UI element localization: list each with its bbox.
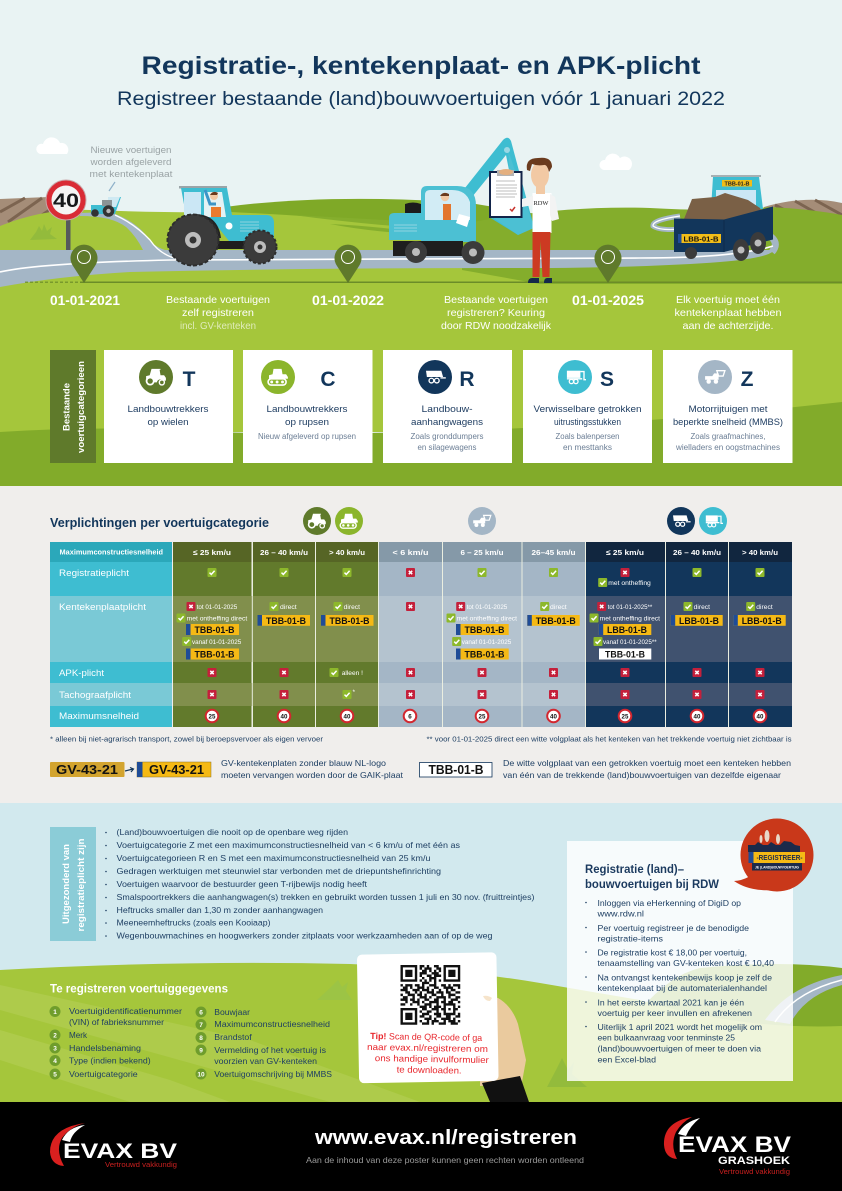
footnotes [50, 734, 792, 744]
icon: speed sign 40 [46, 180, 86, 250]
lower landscape background [0, 803, 842, 1102]
cloud [599, 154, 632, 170]
icon: QR code [400, 966, 460, 1024]
table: licence plate row, trailers: met ontheffing direct [600, 616, 660, 622]
note: new vehicles [89, 145, 173, 191]
list: exempted vehicles: (Land)bouwvoertuigen die nooit op de openbare weg rijden [116, 827, 348, 837]
icon: trailer with soil: TBB-01-B [724, 182, 750, 188]
table: licence plate row, tractors: TBB-01-B [194, 650, 235, 660]
table: header speeds: 26–45 km/u [532, 548, 576, 557]
panel: exempted label: Uitgezonderd van [61, 844, 72, 924]
footnotes: * alleen bij niet-agrarisch transport, zowel bij beroepsvervoer als eigen vervoer [50, 734, 324, 744]
list: vehicle data: Voertuigomschrijving bij MMBS [214, 1069, 332, 1079]
table: maximum speed signs: 25 [479, 713, 486, 720]
list: vehicle data: Bouwjaar [214, 1007, 250, 1017]
panel: RDW registration: www.rdw.nl [596, 908, 644, 918]
list: vehicle data: Merk [69, 1030, 88, 1040]
panel: RDW registration: Inloggen via eHerkenning of DigiD op [598, 898, 741, 908]
table: licence plate row, motor vehicles: met ontheffing direct [457, 616, 517, 622]
panel: RDW registration: tenaamstelling van GV-kenteken kost € 10,40 [598, 958, 774, 968]
table: registration row [208, 568, 764, 587]
table: licence plate row, tractors: direct [280, 604, 297, 611]
panel: category C: Nieuw afgeleverd op rupsen [258, 432, 356, 441]
table: licence plate row, tractors [176, 602, 374, 660]
list: vehicle data: 5 [53, 1072, 57, 1078]
panel: RDW registration: Per voertuig registreer je de benodigde [598, 923, 749, 933]
logo: EVAX BV Grashoek right: GRASHOEK [718, 1155, 790, 1167]
table: licence plate row, motor vehicles: tot 01-01-2025 [467, 604, 508, 611]
icon: RDW man: RDW [534, 201, 549, 207]
table: licence plate row, trailers: LBB-01-B [742, 616, 782, 627]
panel: RDW registration: een Excel-blad [598, 1054, 656, 1064]
panel: category R: Landbouw- [422, 403, 472, 414]
list: vehicle data: 2 [53, 1032, 57, 1040]
footer [0, 1102, 842, 1191]
note: new vehicles: worden afgeleverd [89, 157, 172, 167]
panel: obligations background [0, 486, 842, 803]
white follow plate note: van één van de trekkende (land)bouwvoertuigen van dezelfde eigenaar [503, 770, 781, 780]
panel: existing vehicle categories label: Bestaande [62, 383, 72, 431]
table: maximum speed signs: 40 [694, 713, 701, 720]
panel: category C: C [320, 368, 336, 391]
tip text: te downloaden. [397, 1064, 462, 1076]
table: licence plate row, trailers: vanaf 01-01-2025** [603, 639, 657, 646]
list: vehicle data: 1 [53, 1009, 57, 1016]
footnotes: ** voor 01-01-2025 direct een witte volgplaat als het kenteken van het trekkende voertuig niet zichtbaar is [426, 734, 792, 744]
timeline labels: Elk voertuig moet één [676, 295, 780, 306]
table: licence plate row, motor vehicles: TBB-01-B [536, 616, 576, 627]
icon: big tractor [168, 186, 276, 266]
white follow plate note: De witte volgplaat van een getrokken voertuig moet een kenteken hebben [503, 758, 791, 768]
table: licence plate row, tractors: TBB-01-B [330, 616, 370, 627]
panel: category S: en mesttanks [563, 443, 612, 452]
panel: category Z: Zoals graafmachines, [690, 432, 766, 441]
panel: RDW registration: Uiterlijk 1 april 2021 wordt het mogelijk om [598, 1022, 762, 1032]
tip text: naar evax.nl/registreren om [367, 1042, 488, 1054]
list: exempted vehicles [105, 827, 535, 940]
cloud [36, 137, 68, 154]
panel: exempted label [50, 827, 96, 941]
panel: category Z: Motorrijtuigen met [688, 403, 768, 414]
table: registration row: met ontheffing [608, 580, 651, 587]
icon: register badge [734, 818, 814, 892]
tip text [367, 1031, 489, 1076]
icon: RDW man [522, 158, 559, 283]
icon: trailer circle [667, 507, 695, 535]
timeline labels: 01-01-2021 [50, 293, 120, 308]
panel: category Z [663, 350, 792, 463]
table: header speeds: 26 – 40 km/u [673, 548, 721, 557]
list: exempted vehicles: Smalspoortrekkers die aanhangwagen(s) trekken en gebruikt worden tussen 1 juli en 30 nov. (fruittreintjes) [116, 892, 535, 902]
table: tachograph row: * [352, 689, 356, 696]
table: licence plate row, tractors: met ontheffing direct [187, 616, 247, 622]
table: licence plate row, motor vehicles: direct [550, 604, 567, 611]
timeline labels: aan de achterzijde. [682, 321, 774, 332]
list: exempted vehicles: Wegenbouwmachines en hoogwerkers zonder zitplaats voor werkzaamheden aan of op de weg [116, 930, 493, 940]
logo: EVAX BV Grashoek right: EVAX BV [678, 1132, 791, 1157]
timeline labels: Bestaande voertuigen [444, 295, 548, 306]
timeline labels: Bestaande voertuigen [166, 295, 270, 306]
table: header speeds: < 6 km/u [392, 548, 429, 557]
panel: category C: op rupsen [285, 416, 329, 427]
list: vehicle data: 9 [199, 1048, 203, 1054]
panel: exempted label: registratieplicht zijn [76, 838, 87, 932]
table: row labels: Maximumsnelheid [59, 711, 139, 722]
icon: clipboard [489, 169, 522, 218]
panel: RDW registration: De registratie kost € 18,00 per voertuig, [598, 948, 747, 958]
list: vehicle data: Voertuigidentificatienummer [69, 1006, 182, 1016]
heading: obligations: Verplichtingen per voertuigcategorie [50, 516, 269, 530]
logo: EVAX BV Grashoek right: Vertrouwd vakkundig [719, 1167, 790, 1176]
icon: timeline pin 2022 [334, 245, 362, 283]
panel: category S: Zoals balenpersen [556, 432, 620, 441]
icon: grass tuft [30, 224, 57, 240]
icon: timeline pin 2021 [70, 245, 98, 283]
icon: equipment circle [699, 507, 727, 535]
white follow plate note [420, 758, 791, 780]
table: licence plate row, tractors: TBB-01-B [194, 625, 235, 636]
table: header speeds [193, 548, 778, 557]
white follow plate note: TBB-01-B [428, 762, 484, 777]
table: licence plate row, trailers: tot 01-01-2025** [608, 604, 653, 611]
table: row labels [50, 542, 172, 727]
panel: RDW registration: Na ontvangst kentekenbewijs koop je zelf de [598, 972, 772, 982]
panel: category T: Landbouwtrekkers [128, 403, 209, 414]
tip text: ons handige invulformulier [375, 1053, 489, 1065]
note: new vehicles: Nieuwe voertuigen [90, 145, 172, 155]
panel: RDW registration: bouwvoertuigen bij RDW [585, 879, 719, 891]
table: maximum speed signs: 25 [209, 713, 216, 720]
table: licence plate row, trailers [590, 602, 786, 660]
table: licence plate row, motor vehicles: TBB-01-B [464, 625, 505, 636]
list: vehicle data: 4 [53, 1058, 57, 1065]
icon: motor vehicle circle [468, 507, 496, 535]
table: row labels: APK-plicht [59, 668, 104, 679]
panel: QR card [357, 952, 499, 1083]
timeline labels [50, 293, 782, 332]
timeline labels: zelf registreren [182, 308, 254, 319]
panel: existing vehicle categories label [50, 350, 96, 463]
panel: category T: T [183, 368, 196, 391]
table: maximum speed signs: 40 [757, 713, 764, 720]
list: vehicle data: 8 [199, 1035, 203, 1042]
title: Registratie-, kentekenplaat- en APK-plicht [142, 52, 701, 80]
icon: register badge: -REGISTREER- [756, 853, 803, 862]
list: exempted vehicles: Heftrucks smaller dan 1,30 m zonder aanhangwagen [116, 905, 323, 915]
timeline labels: incl. GV-kenteken [180, 321, 256, 332]
table: header speeds: > 40 km/u [329, 548, 365, 557]
table: licence plate row, tractors: tot 01-01-2025 [197, 604, 238, 611]
list: exempted vehicles: Voertuigcategorie Z met een maximumconstructiesnelheid van < 6 km/u of met één as [116, 840, 460, 850]
icon: tractor circle [303, 507, 331, 535]
table: licence plate row, motor vehicles: vanaf 01-01-2025 [462, 639, 512, 646]
logo: EVAX BV Grashoek right [664, 1117, 791, 1176]
icon: timeline pin 2025 [594, 245, 622, 283]
table: licence plate row, tractors: TBB-01-B [266, 616, 306, 627]
icon: small tractor [91, 197, 121, 217]
panel: category R: en silagewagens [418, 443, 476, 452]
table: APK row: alleen ! [342, 670, 363, 677]
list: vehicle data: Brandstof [214, 1032, 252, 1042]
panel: category R: Zoals gronddumpers [410, 432, 484, 441]
table: maximum speed signs: 40 [550, 713, 557, 720]
panel: RDW registration: (land)bouwvoertuigen of meer te doen via [598, 1044, 761, 1054]
table: header speeds: 6 – 25 km/u [460, 548, 504, 557]
table: header speeds: ≤ 25 km/u [606, 548, 644, 557]
panel: category R [383, 350, 512, 463]
timeline labels: kentekenplaat hebben [674, 308, 782, 319]
table: header speeds: 26 – 40 km/u [260, 548, 308, 557]
table: row labels: Kentekenplaatplicht [59, 602, 146, 613]
panel: RDW registration: In het eerste kwartaal 2021 kan je één [598, 998, 744, 1008]
table: licence plate row, trailers: TBB-01-B [605, 650, 645, 660]
panel: category R: R [459, 368, 475, 391]
footer URL: www.evax.nl/registreren [314, 1127, 577, 1149]
table: APK row [208, 668, 764, 677]
list: vehicle data: 3 [53, 1046, 57, 1052]
table: header speeds: > 40 km/u [742, 548, 778, 557]
table: licence plate row, tractors: direct [344, 604, 360, 611]
timeline labels: 01-01-2022 [312, 293, 384, 308]
panel: category T: op wielen [148, 416, 188, 427]
GV plate conversion: GV-43-21 [149, 762, 204, 777]
list: vehicle data: Vermelding of het voertuig is [214, 1045, 326, 1055]
list: exempted vehicles: Gedragen werktuigen met steunwiel star verbonden met de driepuntshefinrichting [116, 866, 441, 876]
panel: category S [523, 350, 652, 463]
table: row labels: Tachograafplicht [59, 690, 131, 701]
list: exempted vehicles: Voertuigen waarvoor de bestuurder geen T-rijbewijs nodig heeft [116, 879, 368, 889]
GV plate conversion: GV-43-21 [56, 762, 118, 777]
table: licence plate row, tractors: vanaf 01-01-2025 [192, 639, 242, 646]
table: licence plate row, trailers: LBB-01-B [607, 625, 647, 636]
table: licence plate row, trailers: direct [756, 604, 773, 611]
logo: EVAX BV left: EVAX BV [63, 1140, 177, 1163]
panel: RDW registration: een bulkaanvraag voor tenminste 25 [598, 1032, 735, 1042]
list: vehicle data: voorzien van GV-kenteken [214, 1056, 317, 1066]
icon: trailer with soil: LBB-01-B [684, 234, 719, 244]
icon: trailer with soil [674, 175, 773, 261]
road [0, 212, 842, 287]
panel: RDW registration: registratie-items [598, 934, 663, 944]
table: row labels: Registratieplicht [59, 568, 129, 579]
table: tachograph row [208, 689, 764, 699]
icon: hand holding card [480, 996, 529, 1102]
panel: category S: uitrustingsstukken [554, 416, 621, 427]
table: maximum speed signs: 40 [344, 713, 351, 720]
panel: RDW registration: Registratie (land)– [585, 864, 685, 876]
table: row labels: Maximumconstructiesnelheid [60, 550, 163, 556]
panel: category S: Verwisselbare getrokken [534, 403, 642, 414]
GV plate conversion [50, 758, 404, 780]
panel: category R: aanhangwagens [411, 416, 483, 427]
table: licence plate row, trailers: LBB-01-B [679, 616, 719, 627]
icon: excavator [389, 138, 534, 264]
heading: vehicle data: Te registreren voertuiggegevens [50, 984, 228, 996]
table: header speeds: ≤ 25 km/u [193, 548, 231, 557]
list: vehicle data: 7 [199, 1022, 203, 1029]
panel: existing vehicle categories label: voertuigcategorieen [76, 361, 87, 453]
table: licence plate row, motor vehicles: TBB-01-B [464, 650, 505, 660]
list: vehicle data: Type (indien bekend) [69, 1056, 151, 1066]
panel: RDW registration: voertuig per keer invullen en afrekenen [598, 1008, 752, 1018]
table: licence plate row, motor vehicles [406, 602, 580, 660]
table: maximum speed signs: 40 [281, 713, 288, 720]
panel: category Z: Z [741, 368, 754, 391]
table: licence plate row, trailers: direct [694, 604, 710, 611]
top scene background [0, 0, 842, 486]
panel: RDW registration [567, 841, 793, 1081]
panel: category Z: wielladers en oogstmachines [675, 443, 780, 452]
logo: EVAX BV left: Vertrouwd vakkundig [105, 1160, 177, 1169]
timeline labels: registreren? Keuring [447, 308, 545, 319]
panel: category S: S [600, 368, 614, 391]
list: vehicle data [50, 1006, 332, 1080]
table: column backgrounds [173, 542, 792, 727]
logo: EVAX BV left [50, 1123, 177, 1169]
icon: register badge: JE (LAND)BOUWVOERTUIG [755, 864, 799, 870]
panel: category T [104, 350, 233, 463]
list: vehicle data: Voertuigcategorie [69, 1069, 138, 1079]
GV plate conversion: moeten vervangen worden door de GAIK-plaat [221, 770, 404, 780]
panel: category Z: beperkte snelheid (MMBS) [673, 416, 783, 427]
panel: RDW registration: kentekenplaat bij de automaterialenhandel [598, 983, 767, 993]
note: new vehicles: met kentekenplaat [90, 169, 173, 179]
table: maximum speed signs: 6 [408, 713, 412, 720]
timeline labels: door RDW noodzakelijk [441, 321, 552, 332]
list: vehicle data: Handelsbenaming [69, 1043, 141, 1053]
list: exempted vehicles: Voertuigcategorieen R en S met een maximumconstructiesnelheid van 25 km/u [116, 853, 431, 863]
list: exempted vehicles: Meeneemheftrucks (zoals een Kooiaap) [116, 918, 271, 928]
footer disclaimer: Aan de inhoud van deze poster kunnen geen rechten worden ontleend [306, 1155, 584, 1165]
icon: crawler circle [335, 507, 363, 535]
panel: category C [243, 350, 372, 463]
table: maximum speed signs: 25 [622, 713, 629, 720]
list: vehicle data: 6 [199, 1010, 203, 1016]
tip text: Tip! Scan de QR-code of ga [370, 1031, 482, 1043]
list: vehicle data: 10 [197, 1072, 205, 1078]
table: maximum speed signs [206, 710, 766, 722]
icon: speed sign 40: 40 [53, 191, 79, 212]
list: vehicle data: (VIN) of fabrieksnummer [69, 1017, 164, 1027]
subtitle: Registreer bestaande (land)bouwvoertuigen vóór 1 januari 2022 [117, 89, 725, 110]
GV plate conversion: GV-kentekenplaten zonder blauw NL-logo [221, 758, 386, 768]
list: vehicle data: Maximumconstructiesnelheid [214, 1019, 330, 1029]
timeline labels: 01-01-2025 [572, 293, 645, 308]
panel: category C: Landbouwtrekkers [266, 403, 348, 414]
